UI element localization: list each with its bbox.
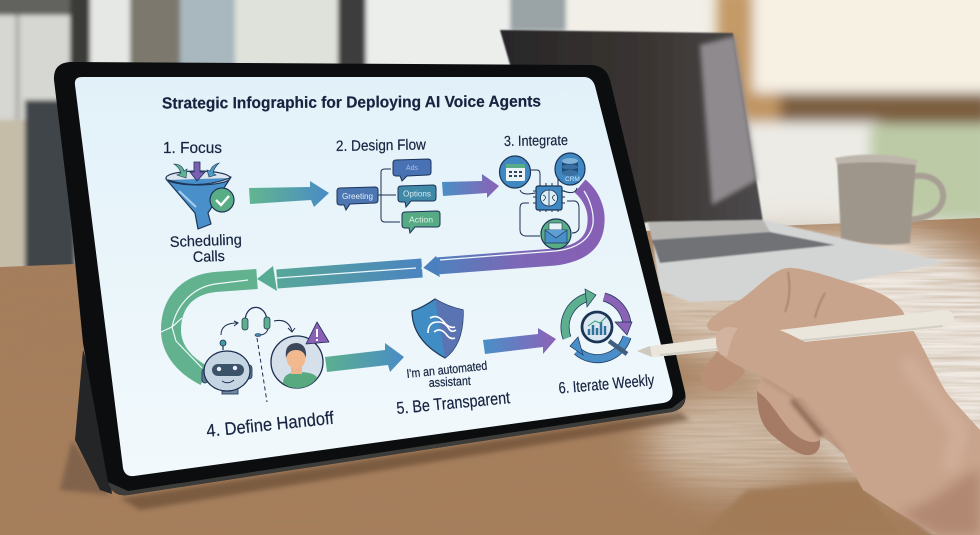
infographic content	[161, 94, 655, 441]
curved path: from integrate to handoff	[257, 186, 596, 291]
thumbnail	[716, 327, 738, 357]
icon: CRM database: CRM	[565, 176, 580, 183]
icon: email envelope	[541, 219, 571, 249]
title: Strategic Infographic for Deploying AI Voice Agents	[162, 94, 541, 112]
blurred office background	[0, 0, 980, 285]
icon: warning triangle	[306, 322, 329, 344]
bubble: Greeting: Greeting	[342, 191, 373, 201]
icon: iteration cycle with magnifier	[565, 289, 632, 359]
integration hub diagram	[500, 153, 585, 249]
bubble: Ads: Ads	[406, 165, 419, 172]
icon: calendar	[500, 156, 530, 188]
hand and index finger	[707, 268, 980, 535]
step 1 heading: Focus: 1. Focus	[163, 140, 222, 157]
icon: headset with handoff arrow	[242, 307, 295, 402]
arc: green	[565, 289, 596, 338]
thumb over stylus	[716, 325, 835, 398]
step 2 heading: Design Flow: 2. Design Flow	[336, 136, 426, 155]
icon: funnel with check	[166, 162, 234, 229]
arrow: step 4 to 5	[325, 343, 404, 372]
hand holding stylus	[637, 268, 980, 535]
bubble: Options: Options	[403, 188, 431, 198]
label: Scheduling Calls	[170, 231, 242, 266]
quote: automated assistant: I'm an automated	[406, 359, 488, 381]
lower finger below stylus	[701, 352, 745, 391]
icon: human agent portrait	[271, 336, 323, 388]
step 4 heading: Define Handoff: 4. Define Handoff	[205, 408, 336, 441]
icon: shield with sound wave	[412, 299, 463, 358]
arrow: step 2 to 3	[442, 174, 499, 198]
quote: automated assistant: assistant	[428, 374, 472, 390]
wooden desk	[0, 218, 980, 535]
bubble: Action: Action	[409, 214, 433, 224]
laptop screen	[500, 30, 763, 236]
step 6 heading: Iterate Weekly: 6. Iterate Weekly	[558, 372, 655, 397]
label: Scheduling Calls: Scheduling	[170, 231, 242, 251]
arc: blue	[570, 337, 627, 359]
stylus pen	[637, 310, 954, 357]
step 3 heading: Integrate: 3. Integrate	[504, 133, 568, 150]
tablet stand	[75, 350, 112, 494]
curved path: into robot	[161, 279, 257, 376]
laptop in background	[500, 30, 945, 302]
label: Scheduling Calls: Calls	[193, 248, 225, 266]
icon: AI chip with brain	[533, 183, 565, 212]
tablet body	[54, 62, 685, 495]
quote: automated assistant	[406, 359, 488, 390]
icon: robot agent	[202, 321, 252, 394]
arrow: step 1 to 2	[249, 181, 329, 207]
flow diagram: speech bubbles	[337, 159, 440, 233]
tablet screen	[75, 77, 673, 476]
arc: purple	[604, 297, 632, 335]
arrow: step 5 to 6	[483, 328, 556, 354]
laptop base	[650, 220, 945, 302]
step 5 heading: Be Transparent: 5. Be Transparent	[396, 388, 511, 418]
curled fingers shading	[757, 390, 820, 455]
coffee mug	[835, 154, 943, 245]
